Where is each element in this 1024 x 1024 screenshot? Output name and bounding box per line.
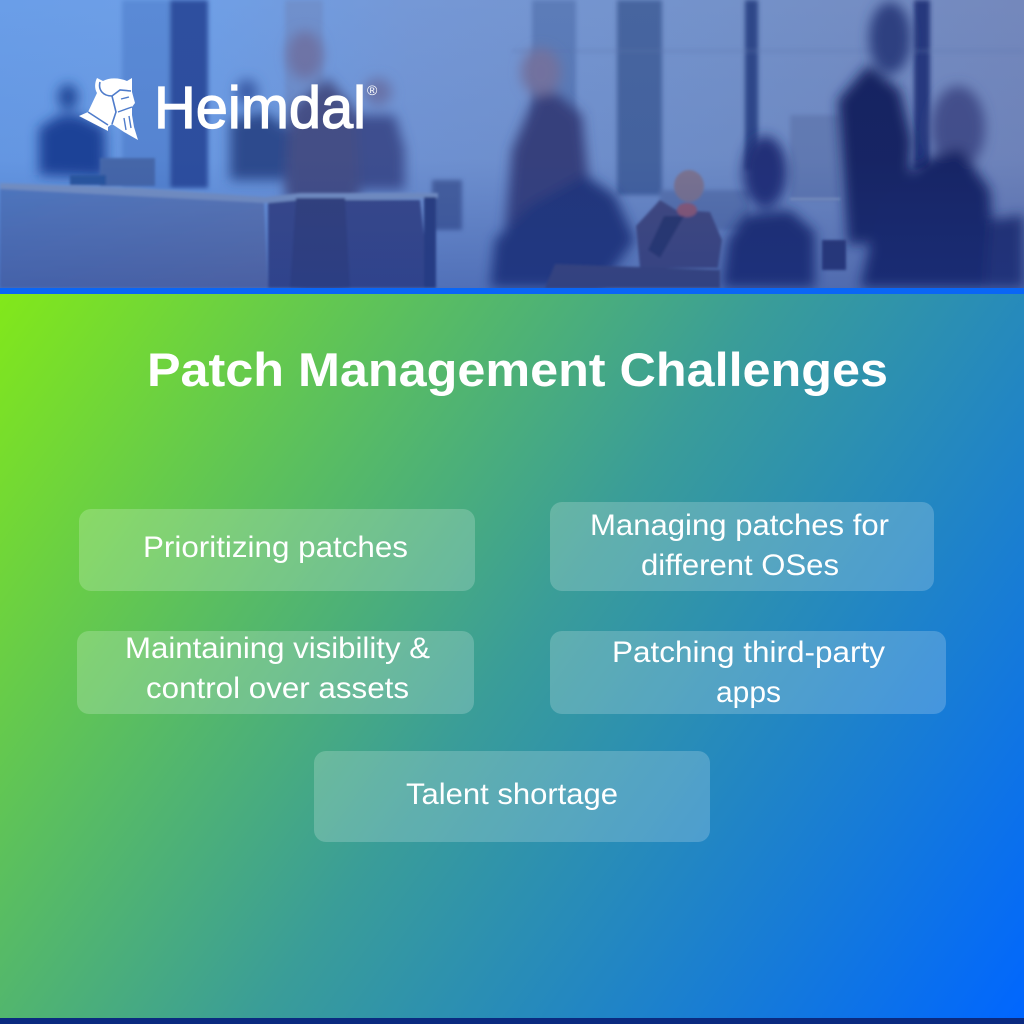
card: Maintaining visibility and control over assets: control over assets [146,672,409,705]
card: Managing patches for different OSes [550,502,934,591]
person: tall man [838,2,912,245]
person: man foreground right [860,86,1024,288]
card: Talent shortage [314,751,710,842]
person: standing centre [285,31,405,288]
logo: Heimdal [79,75,378,141]
person: woman foreground [722,136,815,288]
person: behind pillar [230,79,290,180]
card: Talent shortage: Talent shortage [406,778,618,811]
wordmark: Heimdal [154,75,366,141]
card: Prioritizing patches: Prioritizing patches [143,531,408,564]
card: Patching third-party apps: Patching third-party [612,636,885,669]
registered mark: ® [367,82,378,98]
header photo: blurred office scene with blue tint [0,0,1024,288]
bottom navy bar [0,1018,1024,1024]
card: Patching third-party apps [550,631,946,714]
seated man [636,170,722,268]
card: Maintaining visibility and control over assets [77,631,474,714]
card: Maintaining visibility and control over assets: Maintaining visibility & [125,632,430,665]
card: Managing patches for different OSes: Managing patches for [590,509,889,542]
blue divider line [0,288,1024,294]
desk left [0,186,268,288]
person: centre back turned [490,48,635,288]
card: Managing patches for different OSes: different OSes [641,549,839,582]
card: Prioritizing patches [79,509,475,591]
person: far left [39,84,106,178]
icon: viking head [79,78,138,140]
title: Patch Management Challenges [147,343,888,396]
card: Patching third-party apps: apps [716,676,781,709]
background gradient panel [0,294,1024,1018]
